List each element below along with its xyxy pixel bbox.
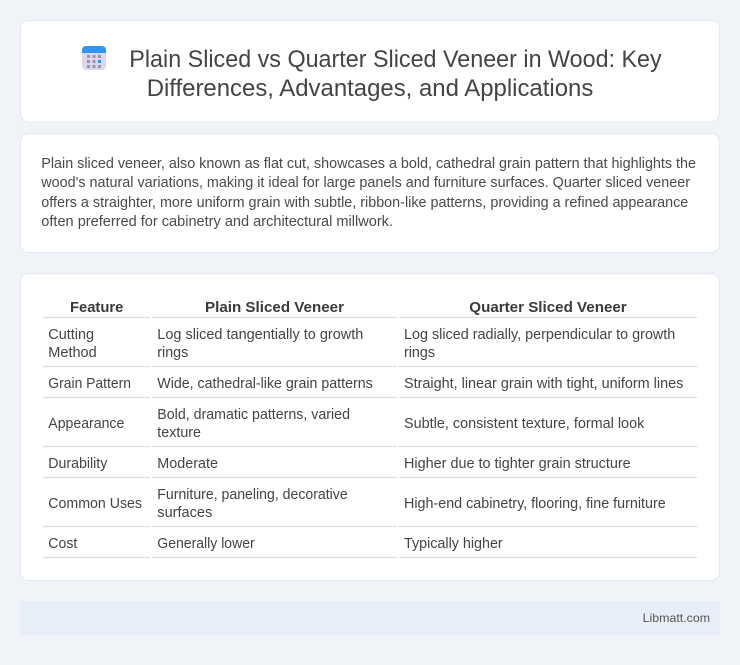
- table row: cutting method: rings: [404, 345, 435, 361]
- table row: cost: [48, 536, 503, 552]
- table row: grain pattern: [48, 376, 683, 392]
- table row: cutting method: [48, 327, 675, 361]
- table row: appearance: texture: [157, 425, 201, 441]
- table row: durability: Durability: [48, 456, 108, 472]
- table header: Feature: [70, 299, 123, 316]
- footer: [20, 601, 720, 635]
- table row: cost: Generally lower: [157, 536, 255, 552]
- table row: cost: Typically higher: [404, 536, 503, 552]
- text block: introduction paragraph: wood's natural variations, making it ideal for large panels and furniture surfaces. Quarter sliced veneer: [40, 175, 690, 191]
- table row: cutting method: Log sliced radially, perpendicular to growth: [404, 327, 675, 343]
- table row: common uses: High-end cabinetry, flooring, fine furniture: [404, 496, 666, 512]
- title: [129, 46, 662, 102]
- panel: comparison table: [20, 274, 720, 580]
- table row: cutting method: Cutting: [48, 327, 94, 343]
- table row: common uses: Furniture, paneling, decorative: [157, 487, 348, 503]
- table row: cost: Cost: [48, 536, 77, 552]
- footer: Libmatt.com: [643, 611, 710, 625]
- icon: calendar: [82, 46, 106, 70]
- table row: common uses: Common Uses: [48, 496, 142, 512]
- table header: Plain Sliced Veneer: [205, 299, 344, 316]
- text block: introduction paragraph: often preferred for cabinetry and architectural millwork.: [41, 214, 393, 230]
- table row: common uses: [48, 487, 666, 521]
- title: Differences, Advantages, and Applications: [147, 75, 593, 102]
- title: Plain Sliced vs Quarter Sliced Veneer in Wood: Key: [129, 46, 662, 73]
- table row: common uses: surfaces: [157, 505, 212, 521]
- table row: durability: Higher due to tighter grain structure: [404, 456, 631, 472]
- panel: title card: [20, 20, 720, 122]
- table row: grain pattern: Grain Pattern: [48, 376, 131, 392]
- table header: [70, 299, 627, 316]
- table row: grain pattern: Wide, cathedral-like grain patterns: [157, 376, 373, 392]
- table row: appearance: Subtle, consistent texture, formal look: [404, 416, 645, 432]
- text block: introduction paragraph: [40, 156, 696, 230]
- table row: durability: Moderate: [157, 456, 218, 472]
- table row: cutting method: Log sliced tangentially to growth: [157, 327, 363, 343]
- table row: appearance: Appearance: [48, 416, 124, 432]
- table row: appearance: [48, 407, 645, 441]
- table row: appearance: Bold, dramatic patterns, varied: [157, 407, 350, 423]
- table row: cutting method: rings: [157, 345, 188, 361]
- table row: durability: [48, 456, 631, 472]
- panel: introduction: [20, 134, 720, 252]
- table row: grain pattern: Straight, linear grain with tight, uniform lines: [404, 376, 683, 392]
- text block: introduction paragraph: offers a straighter, more uniform grain with subtle, ribbon-like patterns, providing a refined appearance: [41, 195, 688, 211]
- table row: cutting method: Method: [48, 345, 97, 361]
- table header: Quarter Sliced Veneer: [469, 299, 627, 316]
- text block: introduction paragraph: Plain sliced veneer, also known as flat cut, showcases a bold, cathedral grain pattern that highlights the: [41, 156, 696, 172]
